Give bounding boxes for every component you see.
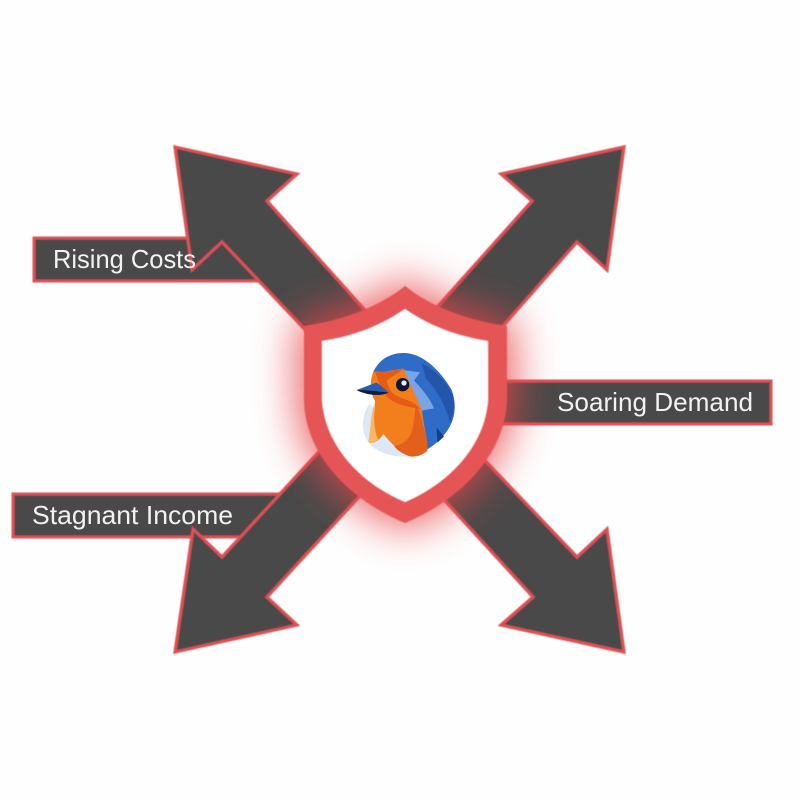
label: Rising Costs: Rising Costs xyxy=(53,244,196,274)
robin: light wing feather xyxy=(403,370,434,411)
robin: beak xyxy=(357,383,389,395)
robin: face shading xyxy=(375,368,421,409)
robin: blue body xyxy=(373,353,455,457)
bar: Soaring Demand xyxy=(490,381,771,424)
robin: dark orange flank xyxy=(394,403,427,457)
bar: Rising Costs xyxy=(34,238,274,281)
shield: white interior xyxy=(322,309,488,502)
icon: robin xyxy=(357,353,455,457)
robin: dark wing shading xyxy=(422,363,454,423)
robin: orange breast xyxy=(368,368,427,457)
arrow: up-left xyxy=(175,147,372,335)
robin: dark tail tip xyxy=(437,427,444,443)
label: Soaring Demand: Soaring Demand xyxy=(557,387,753,417)
shield xyxy=(304,286,507,523)
robin: eye xyxy=(396,378,409,391)
shield: red border xyxy=(304,286,507,523)
label: Stagnant Income: Stagnant Income xyxy=(32,500,233,530)
shield glow xyxy=(304,286,507,523)
arrow: down-left xyxy=(175,445,370,652)
robin: belly shadow xyxy=(363,403,412,457)
arrow: down-right xyxy=(435,450,624,652)
arrow: up-right xyxy=(430,147,624,335)
robin: pale breast edge xyxy=(368,403,378,443)
robin: eye highlight xyxy=(401,380,407,386)
bar: Stagnant Income xyxy=(13,494,293,537)
robin: beak lower xyxy=(357,390,389,395)
